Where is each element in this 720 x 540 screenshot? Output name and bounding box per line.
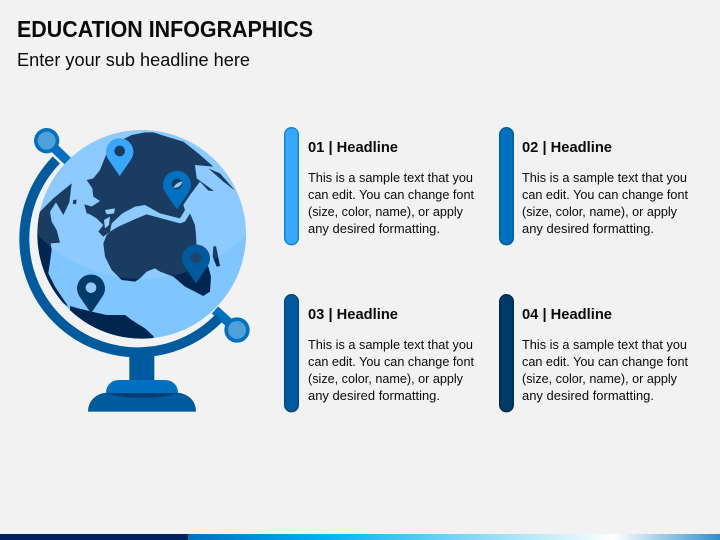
ocean inlets <box>104 208 115 228</box>
body text 03: This is a sample text that you <box>308 337 473 352</box>
body text 02: any desired formatting. <box>522 221 654 236</box>
map pin 2 <box>163 171 191 209</box>
map: western continent <box>33 183 72 307</box>
icon: upper-left axis pin <box>34 128 68 162</box>
map pin 3 <box>182 244 210 283</box>
accent bar 02 <box>500 128 513 245</box>
globe stand collar <box>106 380 178 398</box>
map pin 1 <box>106 138 133 176</box>
body text 04: (size, color, name), or apply <box>522 371 677 386</box>
body text 03: (size, color, name), or apply <box>308 371 463 386</box>
panel: item 02 <box>500 128 688 245</box>
body text 04: This is a sample text that you <box>522 337 687 352</box>
accent bar 03 <box>285 295 298 412</box>
footer colour band <box>0 534 720 540</box>
map: central continent <box>103 213 211 296</box>
body text 01 <box>308 170 474 236</box>
map: southern continent <box>70 306 154 339</box>
body text 04: any desired formatting. <box>522 388 654 403</box>
heading 02: 02 | Headline <box>522 140 612 156</box>
accent bar 04 <box>500 295 513 412</box>
panel: item 03 <box>285 295 474 412</box>
globe stand neck <box>129 355 154 382</box>
map: islands and shards <box>73 168 235 267</box>
map pin 4 <box>77 274 105 313</box>
globe upper highlight <box>38 130 246 279</box>
body text 01: (size, color, name), or apply <box>308 204 463 219</box>
body text 04 <box>522 337 688 403</box>
panel: item 04 <box>500 295 688 412</box>
body text 02: This is a sample text that you <box>522 170 687 185</box>
accent bar 01 <box>285 128 298 245</box>
body text 04: can edit. You can change font <box>522 354 688 369</box>
globe stand arc <box>24 160 219 352</box>
body text 03 <box>308 337 474 403</box>
body text 02: (size, color, name), or apply <box>522 204 677 219</box>
body text 01: This is a sample text that you <box>308 170 473 185</box>
globe illustration <box>19 128 250 412</box>
heading 01: 01 | Headline <box>308 140 398 156</box>
title: EDUCATION INFOGRAPHICS <box>17 16 313 42</box>
heading 03: 03 | Headline <box>308 307 398 323</box>
body text 03: can edit. You can change font <box>308 354 474 369</box>
panel: item 01 <box>285 128 474 245</box>
body text 02 <box>522 170 688 236</box>
icon: lower-right axis pin <box>215 310 250 343</box>
body text 03: any desired formatting. <box>308 388 440 403</box>
body text 01: can edit. You can change font <box>308 187 474 202</box>
body text 02: can edit. You can change font <box>522 187 688 202</box>
subtitle: Enter your sub headline here <box>17 50 250 70</box>
globe sphere with continents <box>37 130 246 339</box>
globe stand base <box>88 393 196 412</box>
map: northern continent <box>87 132 214 237</box>
body text 01: any desired formatting. <box>308 221 440 236</box>
heading 04: 04 | Headline <box>522 307 612 323</box>
